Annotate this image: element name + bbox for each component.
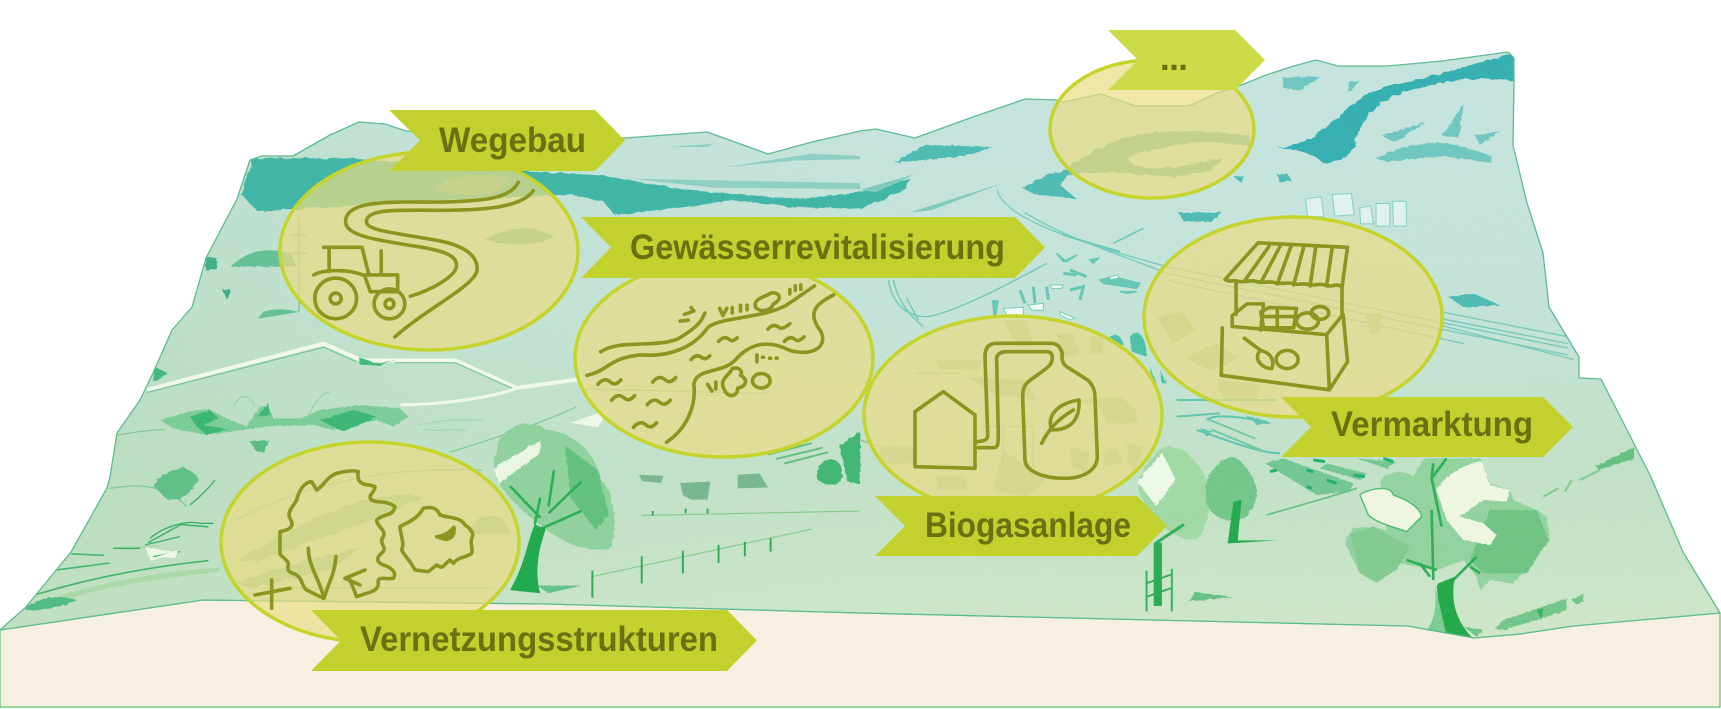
second tree	[1205, 457, 1277, 544]
teal valley patches	[893, 145, 1500, 307]
label: ellipsis	[1108, 30, 1265, 90]
label: Gewässerrevitalisierung	[581, 217, 1045, 278]
icon: road and tractor	[314, 182, 533, 337]
town buildings	[1306, 194, 1406, 226]
label: Biogasanlage: Biogasanlage	[925, 506, 1131, 545]
highway	[997, 190, 1574, 359]
scenery ghosts under Wegebau circle	[236, 175, 554, 267]
left half scenery	[25, 144, 911, 610]
ghost pylon	[291, 217, 307, 312]
pasture fence	[592, 511, 860, 577]
hedge and bush from detail	[113, 393, 483, 558]
label: Wegebau: Wegebau	[439, 121, 586, 160]
label: Gewässerrevitalisierung: Gewässerrevitalisierung	[630, 228, 1005, 267]
ghost village under Biogas circle	[880, 320, 1143, 497]
label: Biogasanlage	[875, 496, 1167, 556]
faded streaks under Vernetzung circle	[236, 495, 510, 588]
lower-left furrows	[55, 545, 219, 601]
label: Wegebau	[389, 110, 625, 171]
field rows	[768, 443, 828, 464]
circle: Biogasanlage	[864, 316, 1162, 514]
cows	[639, 473, 768, 500]
village from detail	[860, 228, 1280, 497]
icon: river revitalisation	[587, 285, 834, 442]
orchard rows	[1265, 458, 1397, 515]
grass tufts	[1189, 448, 1634, 601]
faint ridge streaks	[631, 144, 860, 189]
label: ellipsis: ...	[1160, 39, 1188, 78]
orchard trees	[817, 432, 860, 485]
right half scenery	[860, 53, 1574, 402]
label: Vermarktung: Vermarktung	[1331, 405, 1533, 444]
label: Vernetzungsstrukturen	[311, 610, 757, 671]
label: Vermarktung	[1281, 397, 1573, 457]
icon: market stall	[1221, 243, 1348, 390]
center tree light	[1137, 447, 1210, 611]
teal band under top circle	[1052, 131, 1250, 179]
panel: soil cross-section	[0, 600, 1720, 707]
circle: Wegebau	[280, 152, 578, 350]
right middle trees	[1137, 418, 1634, 611]
left oak tree	[494, 424, 615, 593]
pale lower-field streaks	[110, 389, 768, 506]
ghost village under Vermarktung circle	[1156, 312, 1382, 402]
white track	[147, 344, 581, 390]
circle: Vernetzungsstrukturen	[221, 442, 519, 642]
dark teal tree band	[241, 158, 911, 215]
mountain ridge teal	[1277, 53, 1516, 163]
paper grain	[27, 55, 1634, 636]
label: Vernetzungsstrukturen: Vernetzungsstrukturen	[360, 620, 718, 659]
bushes	[154, 441, 269, 500]
large tree	[1265, 458, 1600, 637]
circle: further measures	[1050, 60, 1254, 198]
icon: trees and hedge	[255, 471, 473, 608]
circle: Vermarktung	[1144, 217, 1442, 417]
icon: biogas plant	[915, 343, 1097, 478]
circle: Gewässerrevitalisierung	[575, 259, 873, 457]
